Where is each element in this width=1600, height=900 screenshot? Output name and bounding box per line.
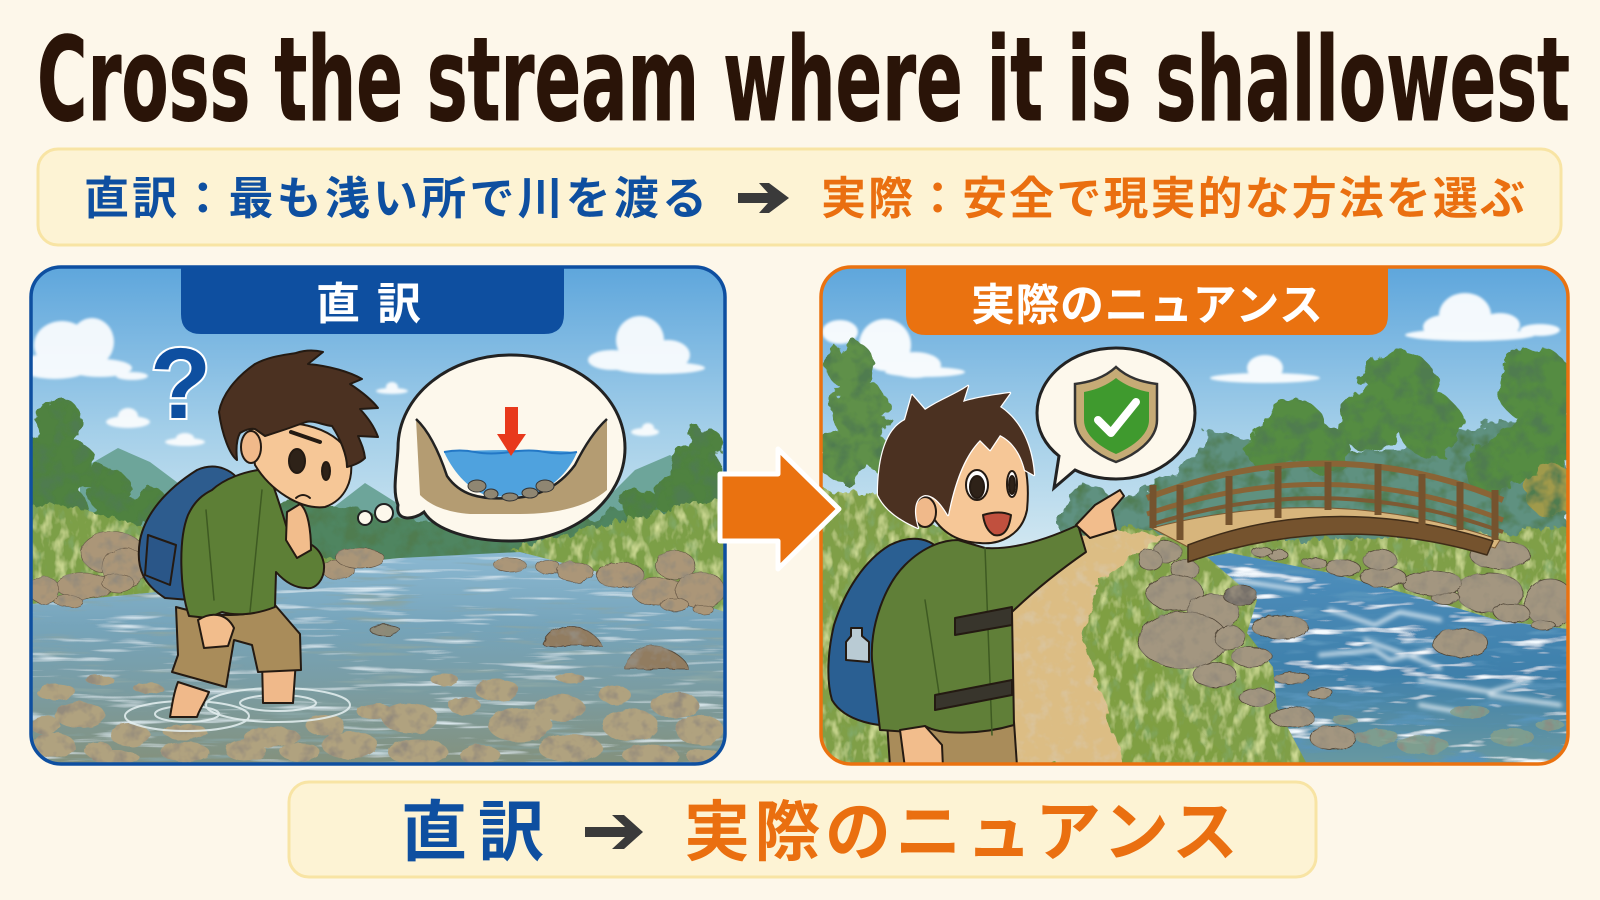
- backpack pocket: [145, 535, 176, 585]
- header tab: literal: 直 訳: [316, 280, 421, 329]
- ground: [815, 490, 1575, 770]
- rapids: [1235, 570, 1560, 712]
- header tab: nuance: [906, 267, 1388, 335]
- eyes: [289, 449, 305, 473]
- bank left: [32, 502, 336, 604]
- river: [1207, 553, 1575, 770]
- eyebrow: [291, 432, 320, 442]
- sleeve line: [925, 548, 992, 735]
- eyes: [966, 470, 988, 500]
- mouth: [296, 495, 310, 498]
- pebbles in river: [1333, 706, 1564, 754]
- speech bubble: [1037, 348, 1195, 488]
- bridge planks: [1152, 508, 1500, 548]
- left trees: [817, 341, 890, 483]
- icon: question mark: ?: [150, 328, 211, 440]
- clouds: [19, 316, 705, 446]
- header tab: nuance: 実際のニュアンス: [971, 281, 1323, 330]
- red arrow: [497, 407, 526, 456]
- literal meaning text: 直訳：最も浅い所で川を渡る: [84, 173, 707, 224]
- face: [925, 433, 1028, 543]
- boy: thinking while wading: [125, 351, 378, 731]
- wooden bridge: [1147, 462, 1503, 562]
- boy: pointing to bridge: [828, 386, 1124, 768]
- dirt path: [1004, 530, 1165, 764]
- actual meaning text: 実際：安全で現実的な方法を選ぶ: [821, 173, 1525, 224]
- pointing hand: [1076, 490, 1124, 538]
- torso: [181, 470, 324, 618]
- bridge beam: [1188, 516, 1493, 562]
- scene: bridge and path: [815, 267, 1579, 770]
- panel: actual nuance: [815, 267, 1579, 770]
- clouds: [822, 293, 1560, 383]
- backpack: [828, 539, 962, 726]
- banner arrow: [738, 183, 789, 213]
- summary: literal: 直訳: [401, 795, 544, 869]
- trees left: [32, 398, 164, 526]
- midstream rocks: [370, 625, 688, 669]
- transition arrow: [720, 449, 839, 569]
- torso and pointing arm: [872, 525, 1086, 733]
- bank right: [510, 498, 724, 612]
- panel border: [31, 267, 725, 764]
- bridge rails: [1147, 463, 1503, 500]
- grass by the path: [1090, 590, 1240, 770]
- panel: literal translation: [16, 267, 736, 765]
- scene: shallow river: [16, 267, 736, 765]
- summary banner: [289, 782, 1316, 877]
- face: [250, 423, 351, 507]
- panel border: [821, 267, 1568, 764]
- ear: [914, 497, 936, 527]
- bridge-side trees: [1248, 347, 1579, 495]
- tree line: [280, 499, 667, 560]
- mountains: [80, 448, 672, 527]
- rocks: [1138, 541, 1575, 750]
- hair: [219, 351, 378, 467]
- ear: [241, 431, 261, 463]
- shorts: [172, 605, 301, 687]
- hair: [878, 386, 1034, 528]
- distant trees: [1060, 420, 1568, 560]
- chest zip: [206, 490, 262, 612]
- summary arrow: [585, 815, 643, 849]
- river cross section: [416, 419, 607, 514]
- pebbles: [30, 673, 724, 765]
- thought bubble: [358, 355, 625, 541]
- translation banner: [38, 149, 1561, 245]
- trousers: [887, 722, 1017, 766]
- legs: [169, 671, 296, 718]
- summary: nuance: 実際のニュアンス: [684, 795, 1238, 869]
- ripples: [125, 688, 350, 731]
- trees right: [622, 427, 736, 523]
- header tab: literal: [181, 267, 564, 334]
- river: [31, 552, 725, 764]
- shore rocks: [29, 532, 725, 614]
- chest straps: [935, 607, 1012, 710]
- right bush: [1522, 462, 1566, 518]
- lower hand: [900, 726, 943, 768]
- hanging hand: [198, 615, 234, 648]
- backpack: [138, 466, 236, 600]
- chin hand: [286, 504, 311, 558]
- mouth: [983, 512, 1011, 535]
- icon: shield with check: [1075, 367, 1157, 462]
- bottle: [846, 628, 869, 662]
